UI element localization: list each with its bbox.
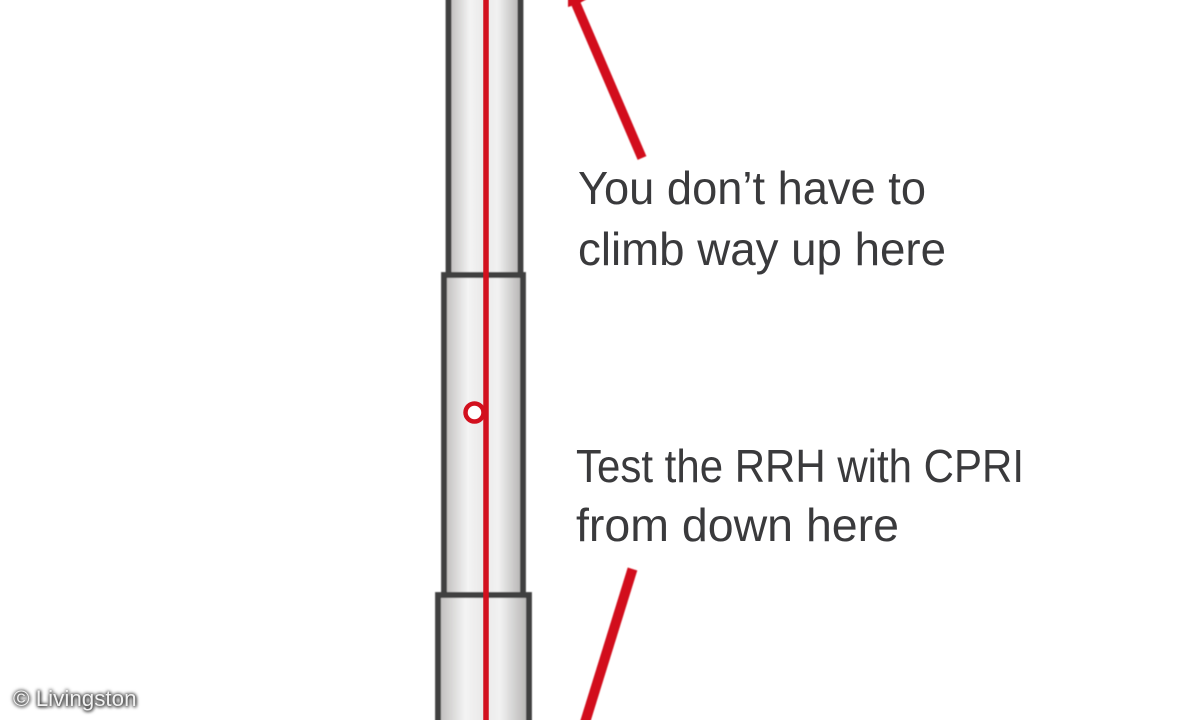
text: test note: from down here	[576, 499, 899, 551]
arrow: pointing up the tower	[568, 0, 642, 158]
copyright credit: © Livingston	[13, 686, 137, 711]
text: climb note	[578, 162, 946, 275]
text: climb note: climb way up here	[578, 223, 946, 275]
text: climb note: You don’t have to	[578, 162, 926, 214]
text: test note	[576, 440, 1024, 551]
RRH connection circle	[466, 404, 484, 422]
middle pole section	[444, 275, 523, 595]
lower pole section	[438, 595, 529, 720]
upper pole section	[448, 0, 520, 275]
tower pole	[438, 0, 529, 720]
arrow: pointing down the tower	[584, 569, 632, 720]
red fiber line	[483, 0, 489, 720]
text: test note: Test the RRH with CPRI	[576, 440, 1024, 492]
